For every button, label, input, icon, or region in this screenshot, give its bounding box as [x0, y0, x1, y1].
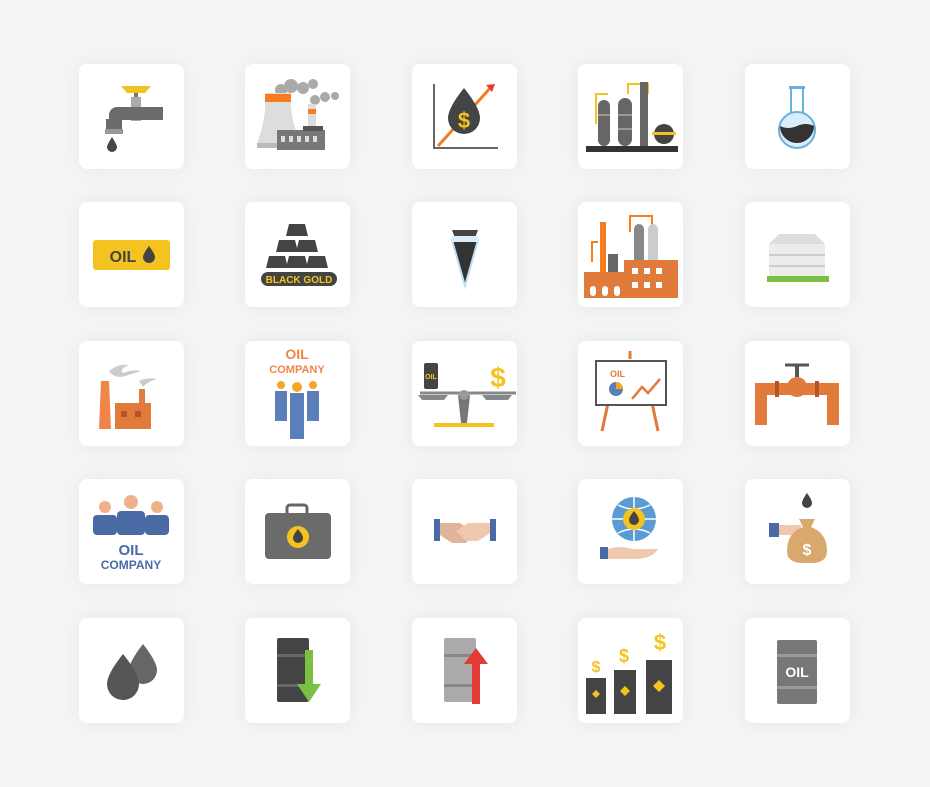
tile: barrels with dollars: $ [654, 630, 666, 655]
tile: barrel up [412, 618, 517, 723]
tile: money bag [745, 479, 850, 584]
tile: faucet [79, 64, 184, 169]
tile: storage tank [745, 202, 850, 307]
tile: oil company people: COMPANY [101, 558, 161, 572]
tile: presentation board [578, 341, 683, 446]
tile: black gold: BLACK GOLD [266, 275, 332, 286]
tile: barrel down [245, 618, 350, 723]
tile: oil company people [79, 479, 184, 584]
tile: briefcase [245, 479, 350, 584]
tile: scale: OIL [425, 374, 438, 381]
tile: oil company workers: OIL [285, 346, 309, 362]
tile: oil company workers [245, 341, 350, 446]
tile: oil company workers: COMPANY [269, 364, 325, 376]
tile: oil barrel: OIL [785, 664, 809, 680]
tile: factory refinery [578, 202, 683, 307]
tile: barrels with dollars [578, 618, 683, 723]
tile: power plant [245, 64, 350, 169]
tile: drops [79, 618, 184, 723]
tile: oil price chart: $ [458, 108, 470, 133]
tile: cone drop [412, 202, 517, 307]
tile: barrels with dollars: $ [619, 646, 629, 666]
tile: oil label: OIL [110, 249, 137, 266]
tile: oil barrel [745, 618, 850, 723]
tile: refinery [578, 64, 683, 169]
tile: black gold [245, 202, 350, 307]
tile: oil label [79, 202, 184, 307]
tile: handshake [412, 479, 517, 584]
tile: money bag: $ [803, 542, 812, 559]
tile: presentation board: OIL [610, 369, 626, 379]
tile: flask [745, 64, 850, 169]
tile: scale: $ [490, 362, 506, 393]
tile: oil price chart [412, 64, 517, 169]
tile: oil company people: OIL [118, 542, 144, 559]
tile: barrels with dollars: $ [592, 659, 601, 676]
tile: factory [79, 341, 184, 446]
tile: scale [412, 341, 517, 446]
tile: globe hand [578, 479, 683, 584]
tile: pipe valve [745, 341, 850, 446]
